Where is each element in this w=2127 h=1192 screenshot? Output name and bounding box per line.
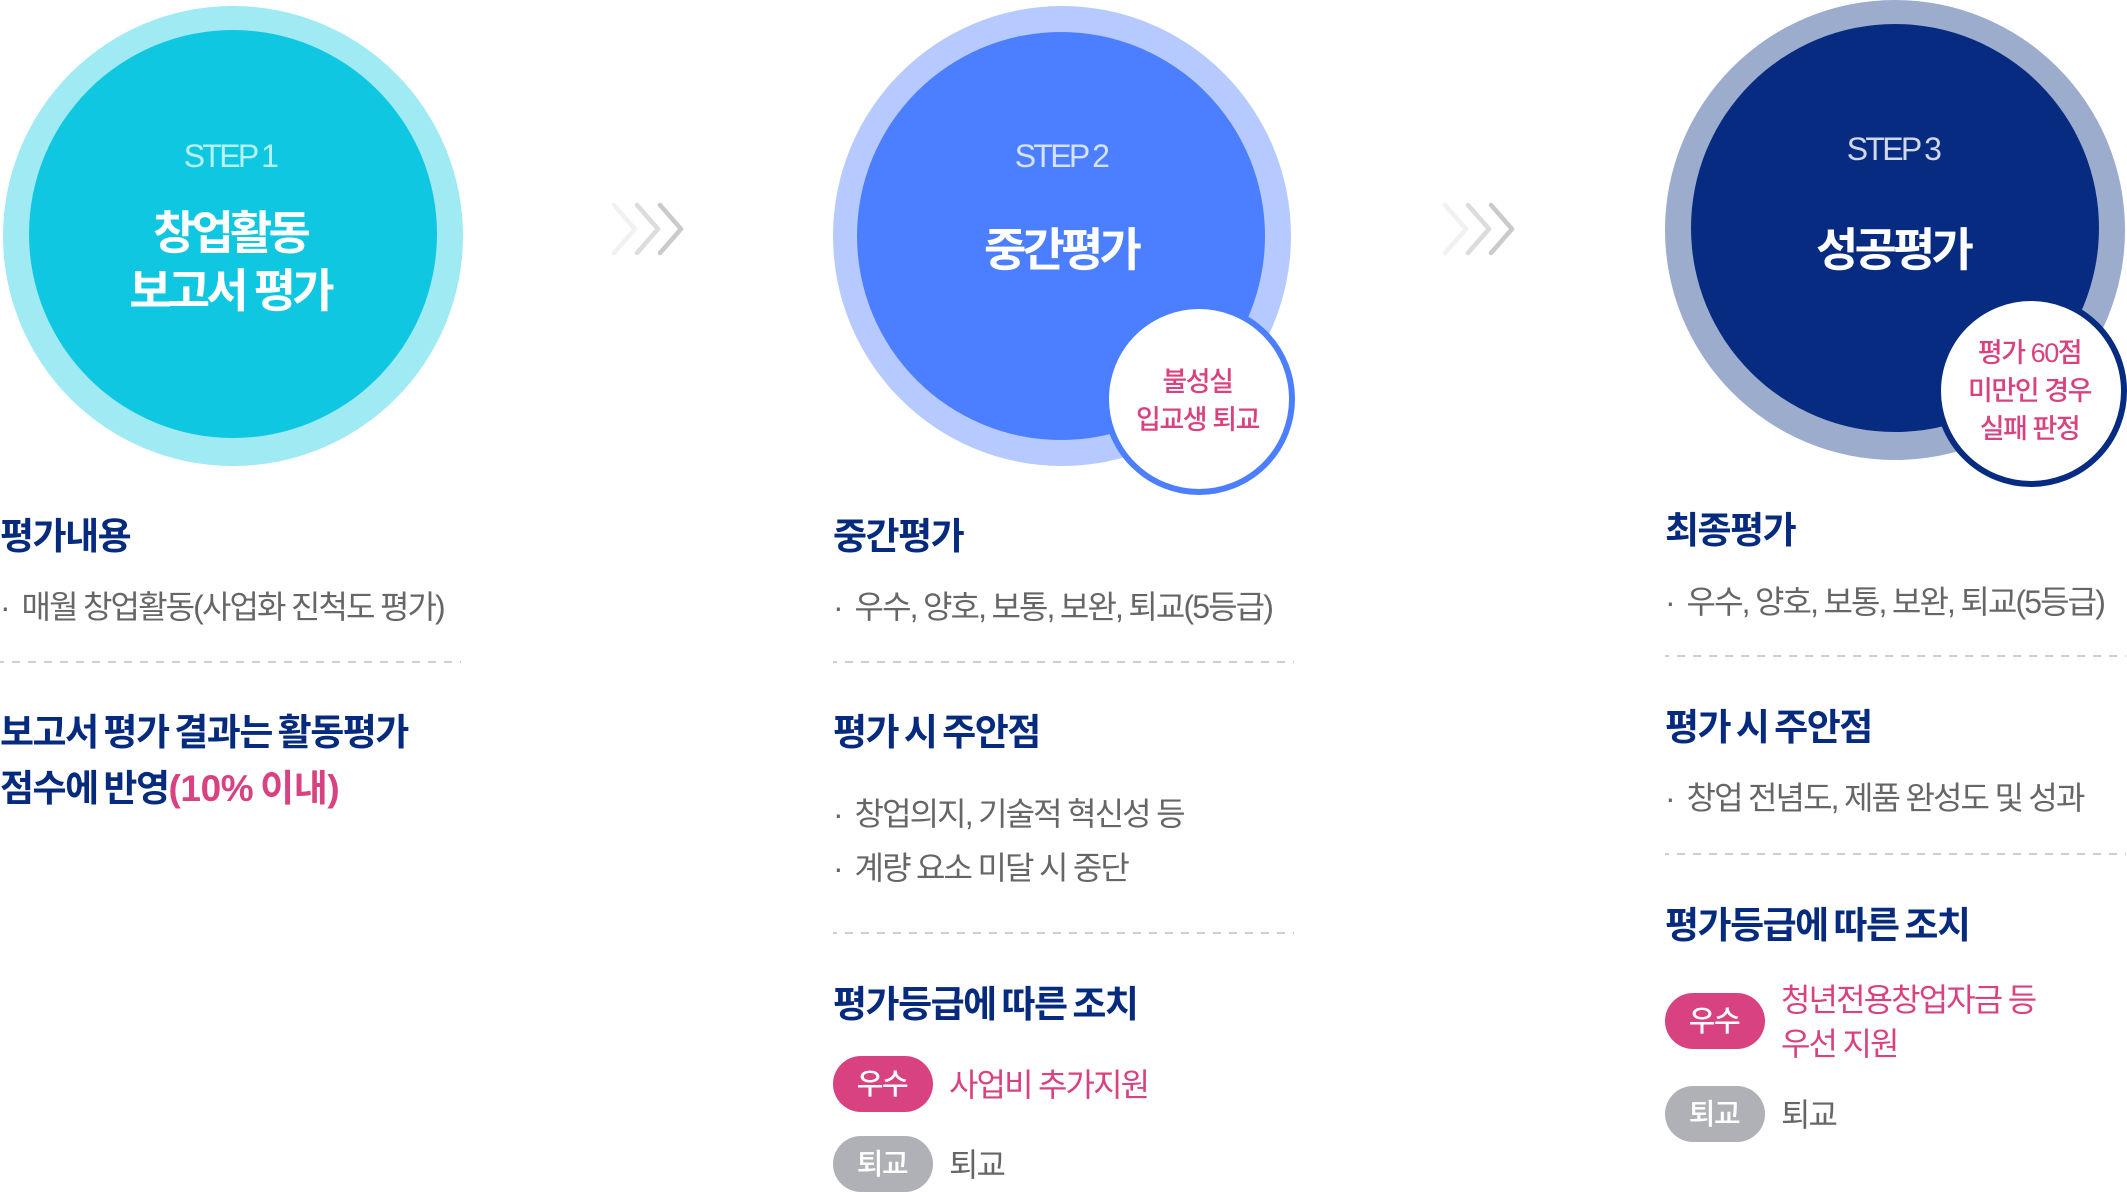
panel: step 1 xyxy=(0,6,463,809)
text: excellent action: 사업비 추가지원 xyxy=(949,1067,1148,1103)
heading: evaluation content: 평가내용 xyxy=(0,516,130,557)
list: cautions: · 창업의지, 기술적 혁신성 등 xyxy=(833,796,1184,832)
text: dismissal action: 퇴교 xyxy=(1781,1097,1836,1133)
badge: fail condition xyxy=(1935,295,2127,487)
heading: cautions: 평가 시 주안점 xyxy=(833,712,1040,753)
badge: fail condition: 불성실 xyxy=(1162,367,1233,397)
pill: dismissal xyxy=(833,1136,933,1192)
list: cautions: · 창업 전념도, 제품 완성도 및 성과 xyxy=(1665,780,2084,816)
text: report result: 보고서 평가 결과는 활동평가 xyxy=(0,712,408,753)
panel: step 2 xyxy=(833,6,1295,1192)
step label: STEP 3 xyxy=(1847,131,1939,167)
heading: final evaluation: 최종평가 xyxy=(1665,510,1795,551)
arrow: step 2 to step 3 xyxy=(1443,202,1514,256)
heading: actions by grade: 평가등급에 따른 조치 xyxy=(833,984,1137,1025)
badge: fail condition: 입교생 퇴교 xyxy=(1136,405,1259,435)
list: grades: · 우수, 양호, 보통, 보완, 퇴교(5등급) xyxy=(1665,584,2104,620)
pill: excellent: 우수 xyxy=(1689,1006,1739,1038)
circle title: 성공평가 xyxy=(1816,224,1970,276)
inner circle: step 2 xyxy=(857,32,1265,440)
list: cautions xyxy=(833,796,1184,886)
inner circle: step 1 xyxy=(29,30,437,438)
pill: dismissal: 퇴교 xyxy=(857,1149,907,1181)
step label: STEP 1 xyxy=(184,138,276,174)
text: excellent action xyxy=(1781,982,2036,1062)
circle: step 2 xyxy=(833,6,1291,466)
heading: actions by grade: 평가등급에 따른 조치 xyxy=(1665,905,1969,946)
text: excellent action: 우선 지원 xyxy=(1781,1026,1898,1062)
circle title: 창업활동 xyxy=(153,207,307,259)
arrow: step 1 to step 2 xyxy=(612,202,684,256)
badge: fail condition: 미만인 경우 xyxy=(1968,376,2091,406)
circle: step 1 xyxy=(3,6,463,466)
circle title xyxy=(129,207,334,317)
text: report result xyxy=(0,712,408,809)
list: evaluation content: · 매월 창업활동(사업화 진척도 평가) xyxy=(0,589,444,625)
list: cautions: · 계량 요소 미달 시 중단 xyxy=(833,850,1128,886)
badge: fail condition xyxy=(1103,303,1295,495)
text: excellent action: 청년전용창업자금 등 xyxy=(1781,982,2035,1018)
badge: fail condition: 실패 판정 xyxy=(1980,414,2079,444)
text: dismissal action: 퇴교 xyxy=(949,1147,1004,1183)
circle title: 보고서 평가 xyxy=(129,265,331,317)
heading: midterm evaluation: 중간평가 xyxy=(833,516,963,557)
badge: fail condition: 평가 60점 xyxy=(1978,338,2081,368)
panel: step 3 xyxy=(1665,0,2127,1142)
pill: excellent xyxy=(833,1056,933,1112)
text: report result: 점수에 반영(10% 이내) xyxy=(0,768,339,809)
circle: step 3 xyxy=(1665,0,2125,460)
pill: excellent: 우수 xyxy=(857,1069,907,1101)
circle title: 중간평가 xyxy=(984,224,1138,276)
pill: excellent xyxy=(1665,993,1765,1049)
pill: dismissal xyxy=(1665,1086,1765,1142)
pill: dismissal: 퇴교 xyxy=(1689,1099,1739,1131)
heading: cautions: 평가 시 주안점 xyxy=(1665,707,1872,748)
inner circle: step 3 xyxy=(1691,24,2099,432)
step label: STEP 2 xyxy=(1015,138,1107,174)
list: grades: · 우수, 양호, 보통, 보완, 퇴교(5등급) xyxy=(833,589,1272,625)
